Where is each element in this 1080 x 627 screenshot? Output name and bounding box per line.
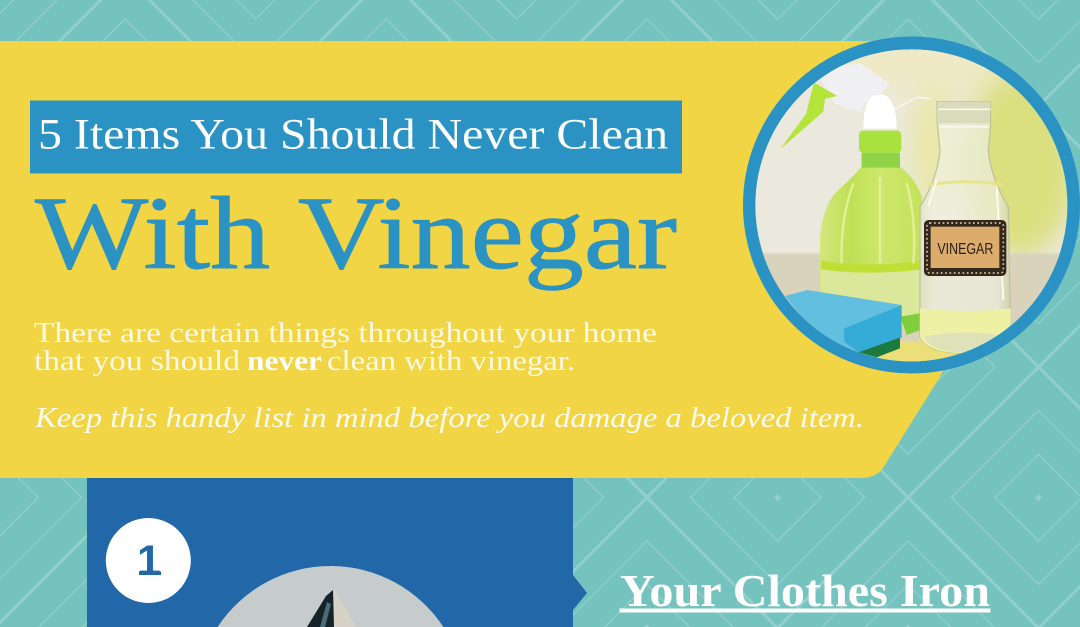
title banner: 5 Items You Should Never Clean: 5 Items You Should Never Clean: [38, 112, 668, 158]
bottle label: [924, 220, 1006, 276]
photo backdrop: [753, 40, 1077, 367]
bottle label: VINEGAR: [937, 241, 993, 258]
heading: With Vinegar: With Vinegar: [35, 176, 677, 291]
title banner: 5 Items You Should Never Clean: [30, 100, 682, 174]
sponge: [785, 290, 902, 357]
number badge: [106, 518, 191, 603]
intro text: There are certain things throughout your home: [34, 318, 657, 349]
photo: clothes iron: [218, 566, 443, 627]
glass vinegar bottle: [920, 102, 1011, 353]
photo: vinegar spray bottle, glass bottle and sponge: [750, 40, 1077, 367]
intro text: never: [247, 346, 322, 377]
intro text: that you should: [34, 346, 240, 377]
panel: item 1: [87, 478, 587, 627]
heading: Your Clothes Iron: Your Clothes Iron: [620, 565, 990, 616]
intro text: [34, 318, 657, 377]
intro text: clean with vinegar.: [327, 346, 575, 377]
spray bottle: [780, 63, 931, 335]
italic note: Keep this handy list in mind before you damage a beloved item.: [34, 403, 864, 434]
number badge: 1: [137, 537, 161, 585]
panel: yellow header: [0, 41, 1040, 478]
